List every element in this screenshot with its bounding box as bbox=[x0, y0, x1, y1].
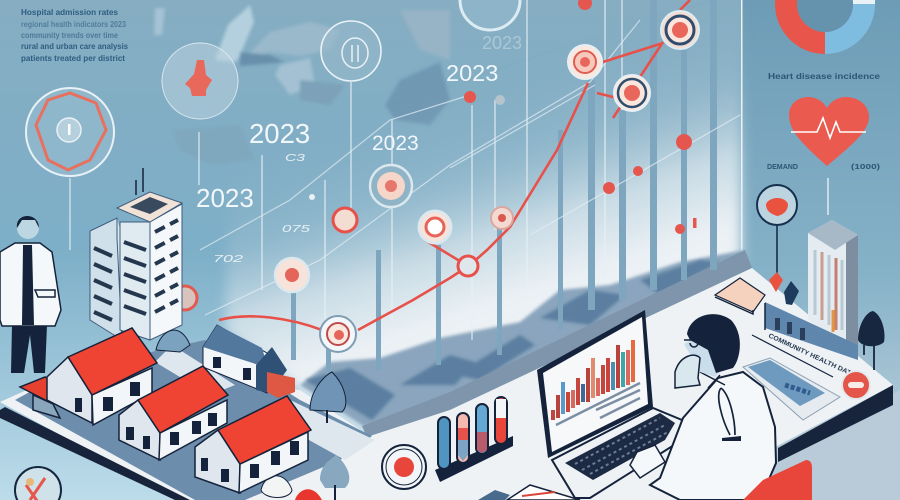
tablet bbox=[743, 358, 840, 420]
house 2 bbox=[119, 366, 228, 460]
icon: red target bbox=[382, 445, 426, 489]
seated doctor bbox=[630, 314, 776, 500]
low blue building with sign bbox=[752, 302, 858, 379]
desk front edges bbox=[0, 385, 893, 500]
red trend line bbox=[219, 0, 690, 330]
tower building bbox=[90, 168, 182, 340]
small faint labels bbox=[213, 153, 311, 265]
heart labels bbox=[767, 162, 881, 171]
data nodes bbox=[173, 0, 699, 352]
notebook bbox=[715, 278, 765, 314]
clipboard bbox=[478, 485, 580, 500]
small faint labels: C3 bbox=[285, 153, 306, 164]
red pin and dark shape bbox=[769, 272, 799, 305]
icon: bottom-left circle bbox=[15, 467, 61, 500]
world map silhouette bbox=[154, 5, 450, 165]
vertical posts bbox=[70, 0, 717, 405]
red chair bbox=[743, 460, 812, 500]
text block: top left caption bbox=[21, 8, 129, 63]
year labels: 2023 bbox=[446, 60, 498, 86]
dark tree bbox=[858, 311, 885, 370]
icon: map lens with figure bbox=[162, 43, 238, 119]
text block: top left caption: rural and urban care analysis bbox=[21, 42, 129, 51]
right-side pin circle bbox=[757, 185, 797, 280]
icon: target circle bbox=[321, 21, 381, 81]
panel base terrain bbox=[300, 250, 752, 437]
year labels: 2023 bbox=[372, 132, 419, 155]
glass data panel bbox=[225, 0, 741, 432]
donut chart bbox=[775, 0, 875, 54]
heart labels: (1000) bbox=[851, 162, 881, 171]
back blue house bbox=[203, 325, 295, 398]
antenna tower bbox=[808, 178, 858, 352]
year labels: 2023 bbox=[249, 118, 310, 149]
text block: top left caption: patients treated per district bbox=[21, 54, 125, 63]
year labels: 2023 bbox=[482, 33, 522, 53]
icon: gauge circle bbox=[26, 88, 114, 176]
house 1 bbox=[20, 328, 157, 425]
text block: top left caption: regional health indicators 2023 bbox=[21, 20, 126, 29]
year labels: 2023 bbox=[196, 183, 254, 213]
ground under houses bbox=[15, 340, 372, 500]
floor lower right bbox=[740, 390, 900, 500]
thin trend lines bbox=[200, 20, 740, 315]
small faint labels: 702 bbox=[213, 254, 244, 265]
red badge bbox=[842, 371, 870, 399]
ground white paths bbox=[155, 345, 375, 460]
desk surface bbox=[0, 268, 893, 500]
small faint labels: 075 bbox=[282, 224, 311, 235]
icon: heart with ecg bbox=[789, 97, 869, 166]
text block: top left caption: Hospital admission rates bbox=[21, 8, 119, 17]
low blue building with sign: COMMUNITY HEALTH DATA bbox=[767, 332, 857, 379]
year labels bbox=[196, 33, 522, 213]
heart labels: DEMAND bbox=[767, 162, 799, 171]
laptop bbox=[537, 310, 682, 498]
panel right edge bbox=[741, 0, 742, 262]
text block: top left caption: community trends over time bbox=[21, 31, 118, 40]
chart on laptop screen bbox=[553, 340, 640, 425]
donut caption: Heart disease incidence bbox=[768, 72, 881, 81]
left doctor bbox=[0, 216, 61, 373]
trees bbox=[156, 330, 349, 500]
test tubes bbox=[435, 397, 513, 482]
house 3 bbox=[195, 396, 311, 493]
